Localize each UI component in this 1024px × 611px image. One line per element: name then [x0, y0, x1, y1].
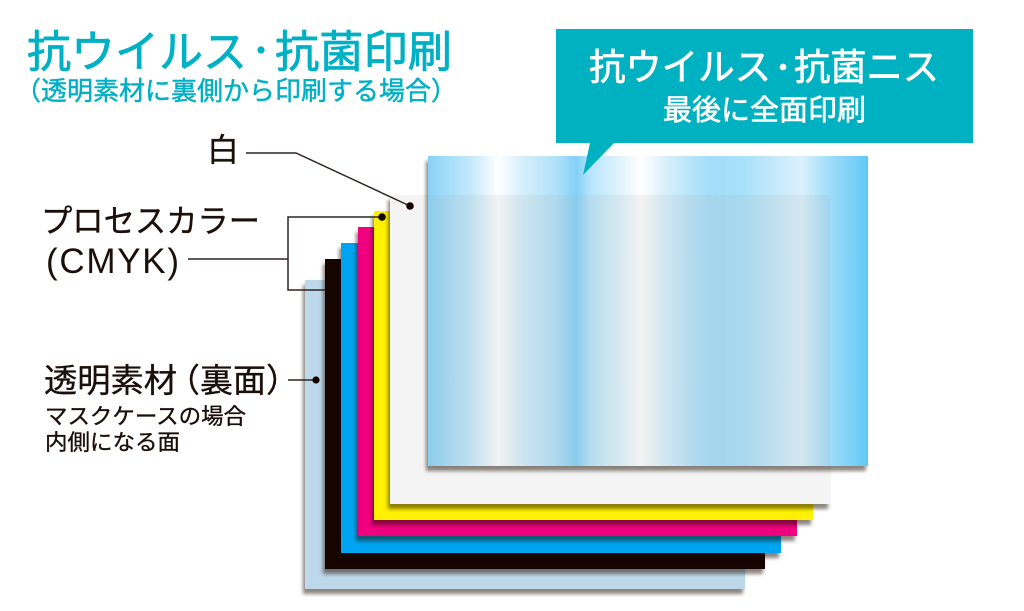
sheet: yellow	[372, 211, 813, 525]
label: transparent material back side	[44, 362, 320, 455]
sheet: cyan	[339, 243, 781, 558]
label: transparent material back side: 内側になる面	[45, 430, 180, 455]
label: process colour CMYK: (CMYK)	[46, 242, 179, 281]
sheet: white	[388, 195, 830, 509]
callout: antiviral varnish: 抗菌ニス	[794, 47, 939, 88]
sheet: magenta	[356, 227, 797, 541]
callout: antiviral varnish	[556, 29, 973, 175]
label: white layer	[207, 132, 414, 210]
label: process colour CMYK: プロセスカラー	[41, 203, 260, 239]
label: white layer: 白	[207, 132, 239, 168]
label: transparent material back side: 透明素材	[44, 362, 177, 399]
callout: antiviral varnish: 抗ウイルス	[589, 47, 771, 88]
sheet: transparent material	[303, 280, 745, 594]
callout: antiviral varnish: 最後に全面印刷	[663, 94, 866, 127]
title	[27, 28, 452, 77]
label: process colour CMYK	[41, 203, 386, 290]
title: 抗ウイルス	[27, 28, 247, 77]
sheet: antiviral varnish	[426, 156, 868, 471]
sheet: black	[323, 259, 765, 574]
label: transparent material back side: マスクケースの場合	[45, 404, 246, 429]
label: transparent material back side: （裏面）	[167, 362, 299, 399]
title: 抗菌印刷	[275, 28, 452, 77]
subtitle: （透明素材に裏側から印刷する場合）	[15, 76, 457, 106]
